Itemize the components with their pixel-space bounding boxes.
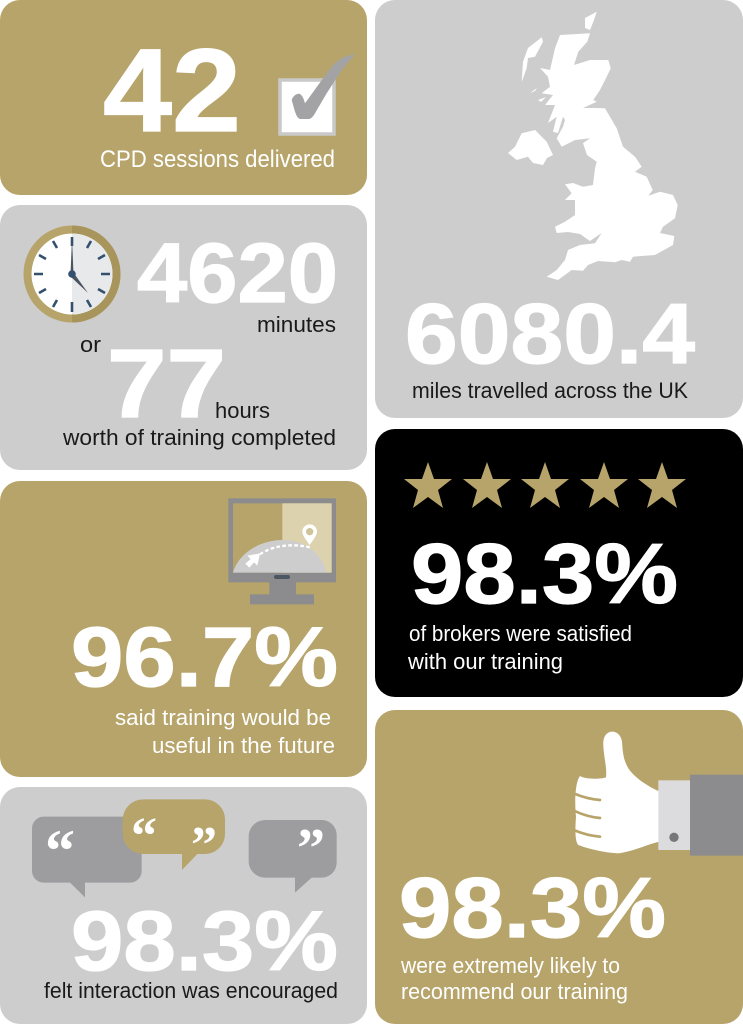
label: or: or <box>80 332 101 357</box>
number: 98.3%: 98.3% <box>411 527 678 622</box>
icon: checkbox <box>280 54 355 134</box>
panel: miles travelled <box>375 0 743 418</box>
caption: were extremely likely to recommend our training: recommend our training <box>401 979 628 1004</box>
number: 96.7%: 96.7% <box>71 610 338 704</box>
number: 98.3%: 98.3% <box>399 861 666 956</box>
caption: said training would be useful in the future: said training would be <box>115 705 331 730</box>
number: 42: 42 <box>103 25 241 157</box>
icon: clock <box>24 226 121 322</box>
quote mark: ” <box>191 817 217 874</box>
quote mark: ” <box>297 818 325 880</box>
panel: interaction <box>0 787 367 1024</box>
map: United Kingdom <box>508 12 678 280</box>
number: 4620: 4620 <box>137 226 338 320</box>
caption: said training would be useful in the future: useful in the future <box>152 733 335 758</box>
panel: brokers satisfied <box>375 429 743 697</box>
number: 6080.4: 6080.4 <box>405 287 695 382</box>
number: 77: 77 <box>107 329 226 438</box>
quote mark: “ <box>45 818 75 884</box>
icon: speech bubbles <box>32 799 337 897</box>
caption: miles travelled across the UK: miles travelled across the UK <box>412 378 688 403</box>
caption: of brokers were satisfied with our training <box>407 621 632 674</box>
caption: of brokers were satisfied with our training: with our training <box>407 649 563 674</box>
caption: worth of training completed: worth of training completed <box>62 425 336 450</box>
panel: recommend <box>375 710 743 1024</box>
icon: five stars <box>404 462 686 508</box>
panel: useful in the future <box>0 481 367 777</box>
icon: thumbs up <box>575 732 743 856</box>
number: 98.3%: 98.3% <box>71 894 338 988</box>
caption: said training would be useful in the future <box>115 705 335 758</box>
caption: were extremely likely to recommend our training <box>400 953 628 1004</box>
quote mark: “ <box>131 808 157 865</box>
label: minutes: minutes <box>257 312 336 337</box>
caption: were extremely likely to recommend our training: were extremely likely to <box>400 953 620 978</box>
label: hours: hours <box>215 398 270 423</box>
caption: of brokers were satisfied with our training: of brokers were satisfied <box>409 621 632 646</box>
panel: CPD sessions <box>0 0 367 195</box>
caption: felt interaction was encouraged: felt interaction was encouraged <box>44 978 338 1003</box>
panel: training time <box>0 205 367 470</box>
caption: CPD sessions delivered: CPD sessions delivered <box>100 146 335 173</box>
icon: monitor with route <box>228 498 336 604</box>
